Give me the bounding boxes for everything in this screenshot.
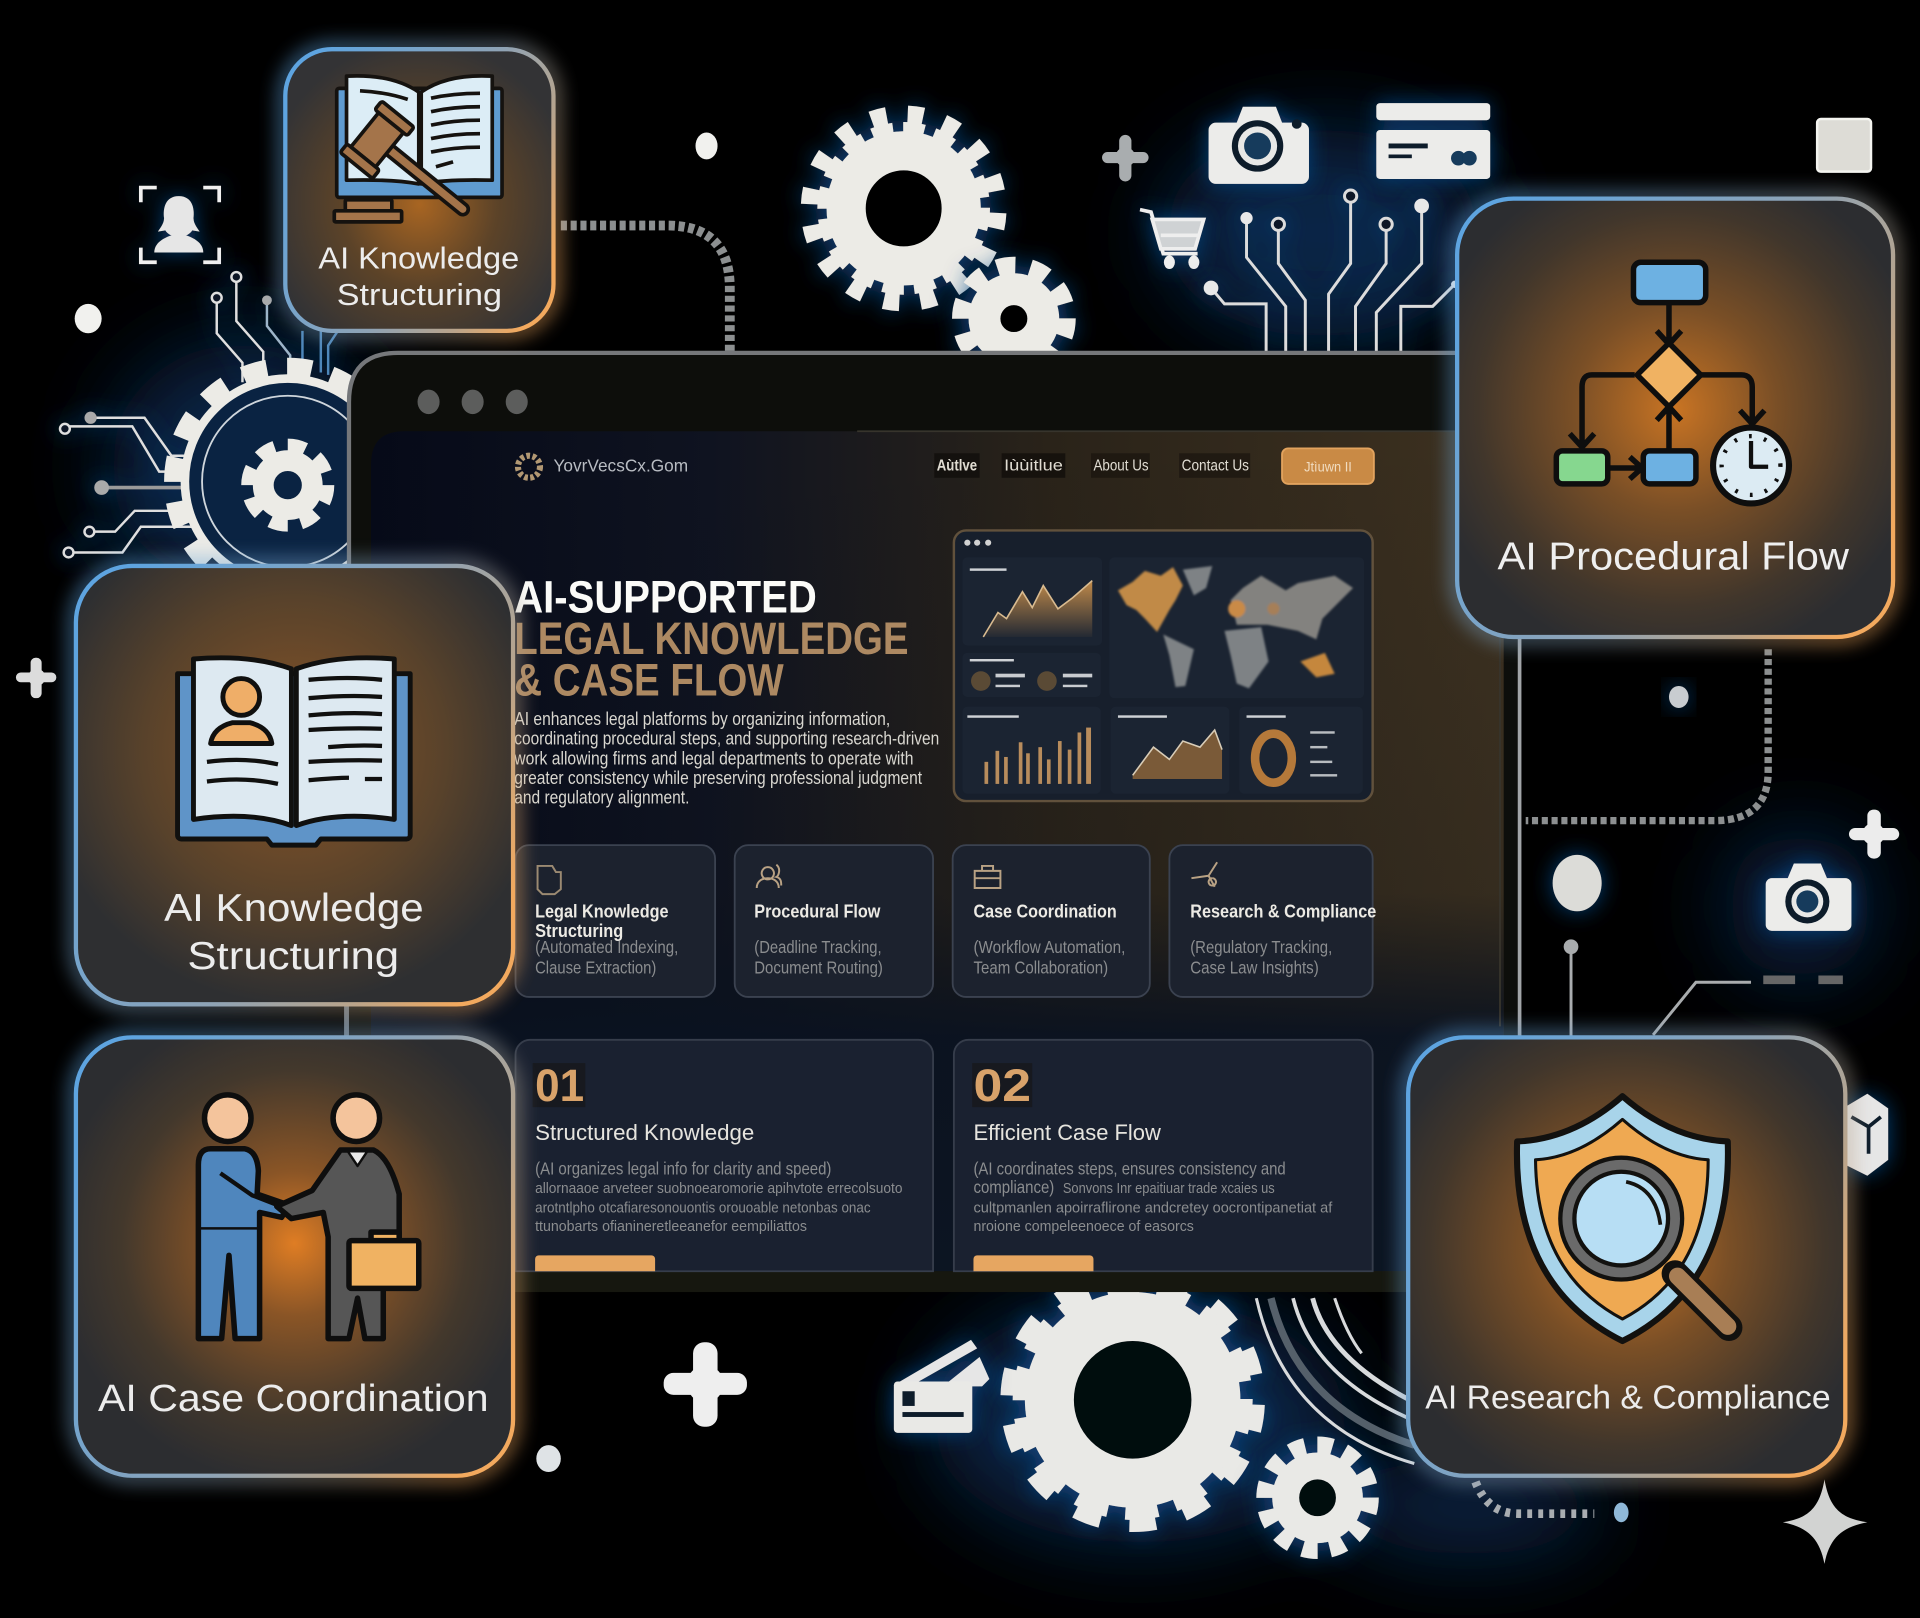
intro paragraph: coordinating procedural steps, and supporting research-driven <box>514 728 939 749</box>
gear: large bottom <box>1010 1277 1255 1522</box>
bottom bar <box>349 1271 1520 1292</box>
heading <box>514 571 909 706</box>
chart panel: summary <box>962 653 1101 697</box>
dotted connector: bottom right <box>1476 1482 1594 1514</box>
card: AI procedural flow: AI Procedural Flow <box>1498 536 1850 579</box>
intro paragraph <box>513 708 939 807</box>
benefit card: structured knowledge: arotntlpho otcafiaresonouontis orouoable netonbas onac <box>535 1200 871 1216</box>
feature card: case coordination <box>953 845 1150 997</box>
feature card: research and compliance: Case Law Insights) <box>1190 958 1319 978</box>
card: AI knowledge structuring (top): Structuring <box>337 278 502 312</box>
connector between left cards <box>345 1004 349 1037</box>
icon: face scan <box>141 188 219 262</box>
navigation: Iùùitlue <box>1004 457 1063 474</box>
feature card: research and compliance: (Regulatory Tracking, <box>1190 937 1332 957</box>
card: AI knowledge structuring (left): Structuring <box>187 935 399 978</box>
benefit card: efficient case flow: 02 <box>973 1060 1031 1111</box>
navigation: Contact Us <box>1182 457 1249 474</box>
gear: left inner <box>249 446 327 524</box>
benefit card: structured knowledge: allornaaoe arveteer suobnoearomorie apihvtote errecolsuoto <box>535 1181 902 1197</box>
feature card: procedural flow: Procedural Flow <box>754 900 881 921</box>
site logo: YovrVecsCx.Gom <box>553 456 688 476</box>
benefit card: structured knowledge: Structured Knowledge <box>535 1120 754 1145</box>
arcs bottom <box>1256 1298 1414 1463</box>
icon: scissors <box>1191 862 1217 887</box>
feature card: procedural flow <box>735 845 933 997</box>
icon: square tile <box>1817 119 1871 172</box>
feature card: case coordination: Case Coordination <box>973 900 1117 921</box>
card: AI knowledge structuring (top): AI Knowledge <box>318 241 519 275</box>
heading: & CASE FLOW <box>514 655 784 706</box>
icon: briefcase <box>975 866 1000 888</box>
sparkle: plus shapes <box>16 135 1899 1427</box>
icon: handshake <box>198 1095 419 1339</box>
card: AI knowledge structuring (top) <box>285 49 553 331</box>
circuit lines: top right <box>1204 190 1458 353</box>
navigation: About Us <box>1093 457 1149 474</box>
window frame <box>349 353 1520 1292</box>
icon: four-point star <box>1783 1479 1867 1564</box>
chart panel: bars <box>962 707 1101 794</box>
gear: left ring <box>175 369 400 594</box>
icon: bank card bottom <box>894 1340 989 1433</box>
icon: camera <box>1209 107 1309 184</box>
chart panel: area 2 <box>1111 707 1229 794</box>
icon: document stack <box>538 866 561 894</box>
benefit card: efficient case flow: nroione compeleenoece of easorcs <box>973 1219 1194 1235</box>
dotted connector: top <box>561 226 730 353</box>
circuit lines: right middle <box>1564 939 1843 1037</box>
icon: flowchart <box>1556 262 1789 503</box>
feature card: legal knowledge: Legal Knowledge <box>535 900 669 921</box>
benefit card: structured knowledge: 01 <box>535 1060 584 1111</box>
feature card: legal knowledge: Structuring <box>535 920 623 941</box>
browser window <box>349 353 1520 1292</box>
icon: people <box>757 865 781 888</box>
decorative dots <box>75 132 1689 1522</box>
benefit card: efficient case flow: compliance) <box>973 1177 1054 1197</box>
feature card: case coordination: (Workflow Automation, <box>973 937 1125 957</box>
feature card: legal knowledge <box>516 845 715 997</box>
heading: AI-SUPPORTED <box>514 571 817 622</box>
feature card: research and compliance: Research & Compliance <box>1190 900 1376 921</box>
feature card: procedural flow: (Deadline Tracking, <box>754 937 882 957</box>
card: AI knowledge structuring (left): AI Knowledge <box>164 887 424 930</box>
feature card: procedural flow: Document Routing) <box>754 958 883 978</box>
benefit card: structured knowledge: ttunobarts ofianineretleeanefor eempiliattos <box>535 1219 807 1235</box>
window control dots <box>418 390 528 414</box>
dashboard <box>954 530 1373 801</box>
benefit card: efficient case flow: Efficient Case Flow <box>973 1120 1161 1145</box>
heading: LEGAL KNOWLEDGE <box>514 613 909 664</box>
benefit card: efficient case flow: (AI coordinates steps, ensures consistency and <box>973 1159 1286 1179</box>
card: AI procedural flow <box>1457 199 1893 637</box>
nav button <box>1282 448 1374 484</box>
dotted connector: right <box>1526 649 1768 821</box>
card: AI case coordination: AI Case Coordination <box>98 1378 489 1420</box>
page background <box>371 431 1504 1271</box>
circuit lines: left gear <box>60 272 338 557</box>
feature card: legal knowledge: (Automated Indexing, <box>535 937 678 957</box>
gear: small bottom <box>1265 1445 1370 1550</box>
navigation: Aùtlve <box>937 457 977 474</box>
icon: box <box>1843 1094 1888 1176</box>
nav button: Jtìuwn II <box>1304 459 1352 475</box>
icon: small camera <box>1766 863 1851 931</box>
card: AI case coordination <box>76 1037 513 1476</box>
dashboard dots <box>964 540 991 546</box>
intro paragraph: AI enhances legal platforms by organizing information, <box>514 708 890 729</box>
card: AI research and compliance: AI Research & Compliance <box>1425 1379 1831 1416</box>
chart panel: area <box>962 557 1102 646</box>
card: AI knowledge structuring (left) <box>76 566 513 1004</box>
chart panel: world map <box>1109 557 1364 698</box>
chart panel: donut <box>1239 707 1363 794</box>
benefit card: efficient case flow <box>954 1040 1373 1271</box>
button <box>535 1255 655 1271</box>
benefit card: efficient case flow: Sonvons Inr epaitiuar trade xcaies us <box>1063 1181 1275 1197</box>
icon: credit card <box>1376 103 1490 179</box>
intro paragraph: and regulatory alignment. <box>514 786 689 807</box>
intro paragraph: work allowing firms and legal departments to operate with <box>513 747 913 768</box>
button <box>973 1255 1093 1271</box>
benefit card: structured knowledge <box>516 1040 933 1271</box>
card: AI research and compliance <box>1408 1037 1845 1476</box>
gear: large top <box>811 115 997 301</box>
icon: shield with magnifier <box>1517 1096 1729 1341</box>
benefit card: efficient case flow: cultpmanlen apoirraflirone andcretey oocrontipanetiat af <box>973 1200 1333 1216</box>
feature card: case coordination: Team Collaboration) <box>973 958 1108 978</box>
intro paragraph: greater consistency while preserving professional judgment <box>514 767 922 788</box>
icon: book and gavel <box>334 76 502 235</box>
icon: open book with person <box>178 658 410 845</box>
icon: shopping cart <box>1140 210 1204 267</box>
navigation <box>934 453 1250 478</box>
feature card: legal knowledge: Clause Extraction) <box>535 958 656 978</box>
feature card: research and compliance <box>1169 845 1376 997</box>
gear: small top <box>961 266 1067 371</box>
benefit card: structured knowledge: (AI organizes legal info for clarity and speed) <box>535 1159 831 1179</box>
